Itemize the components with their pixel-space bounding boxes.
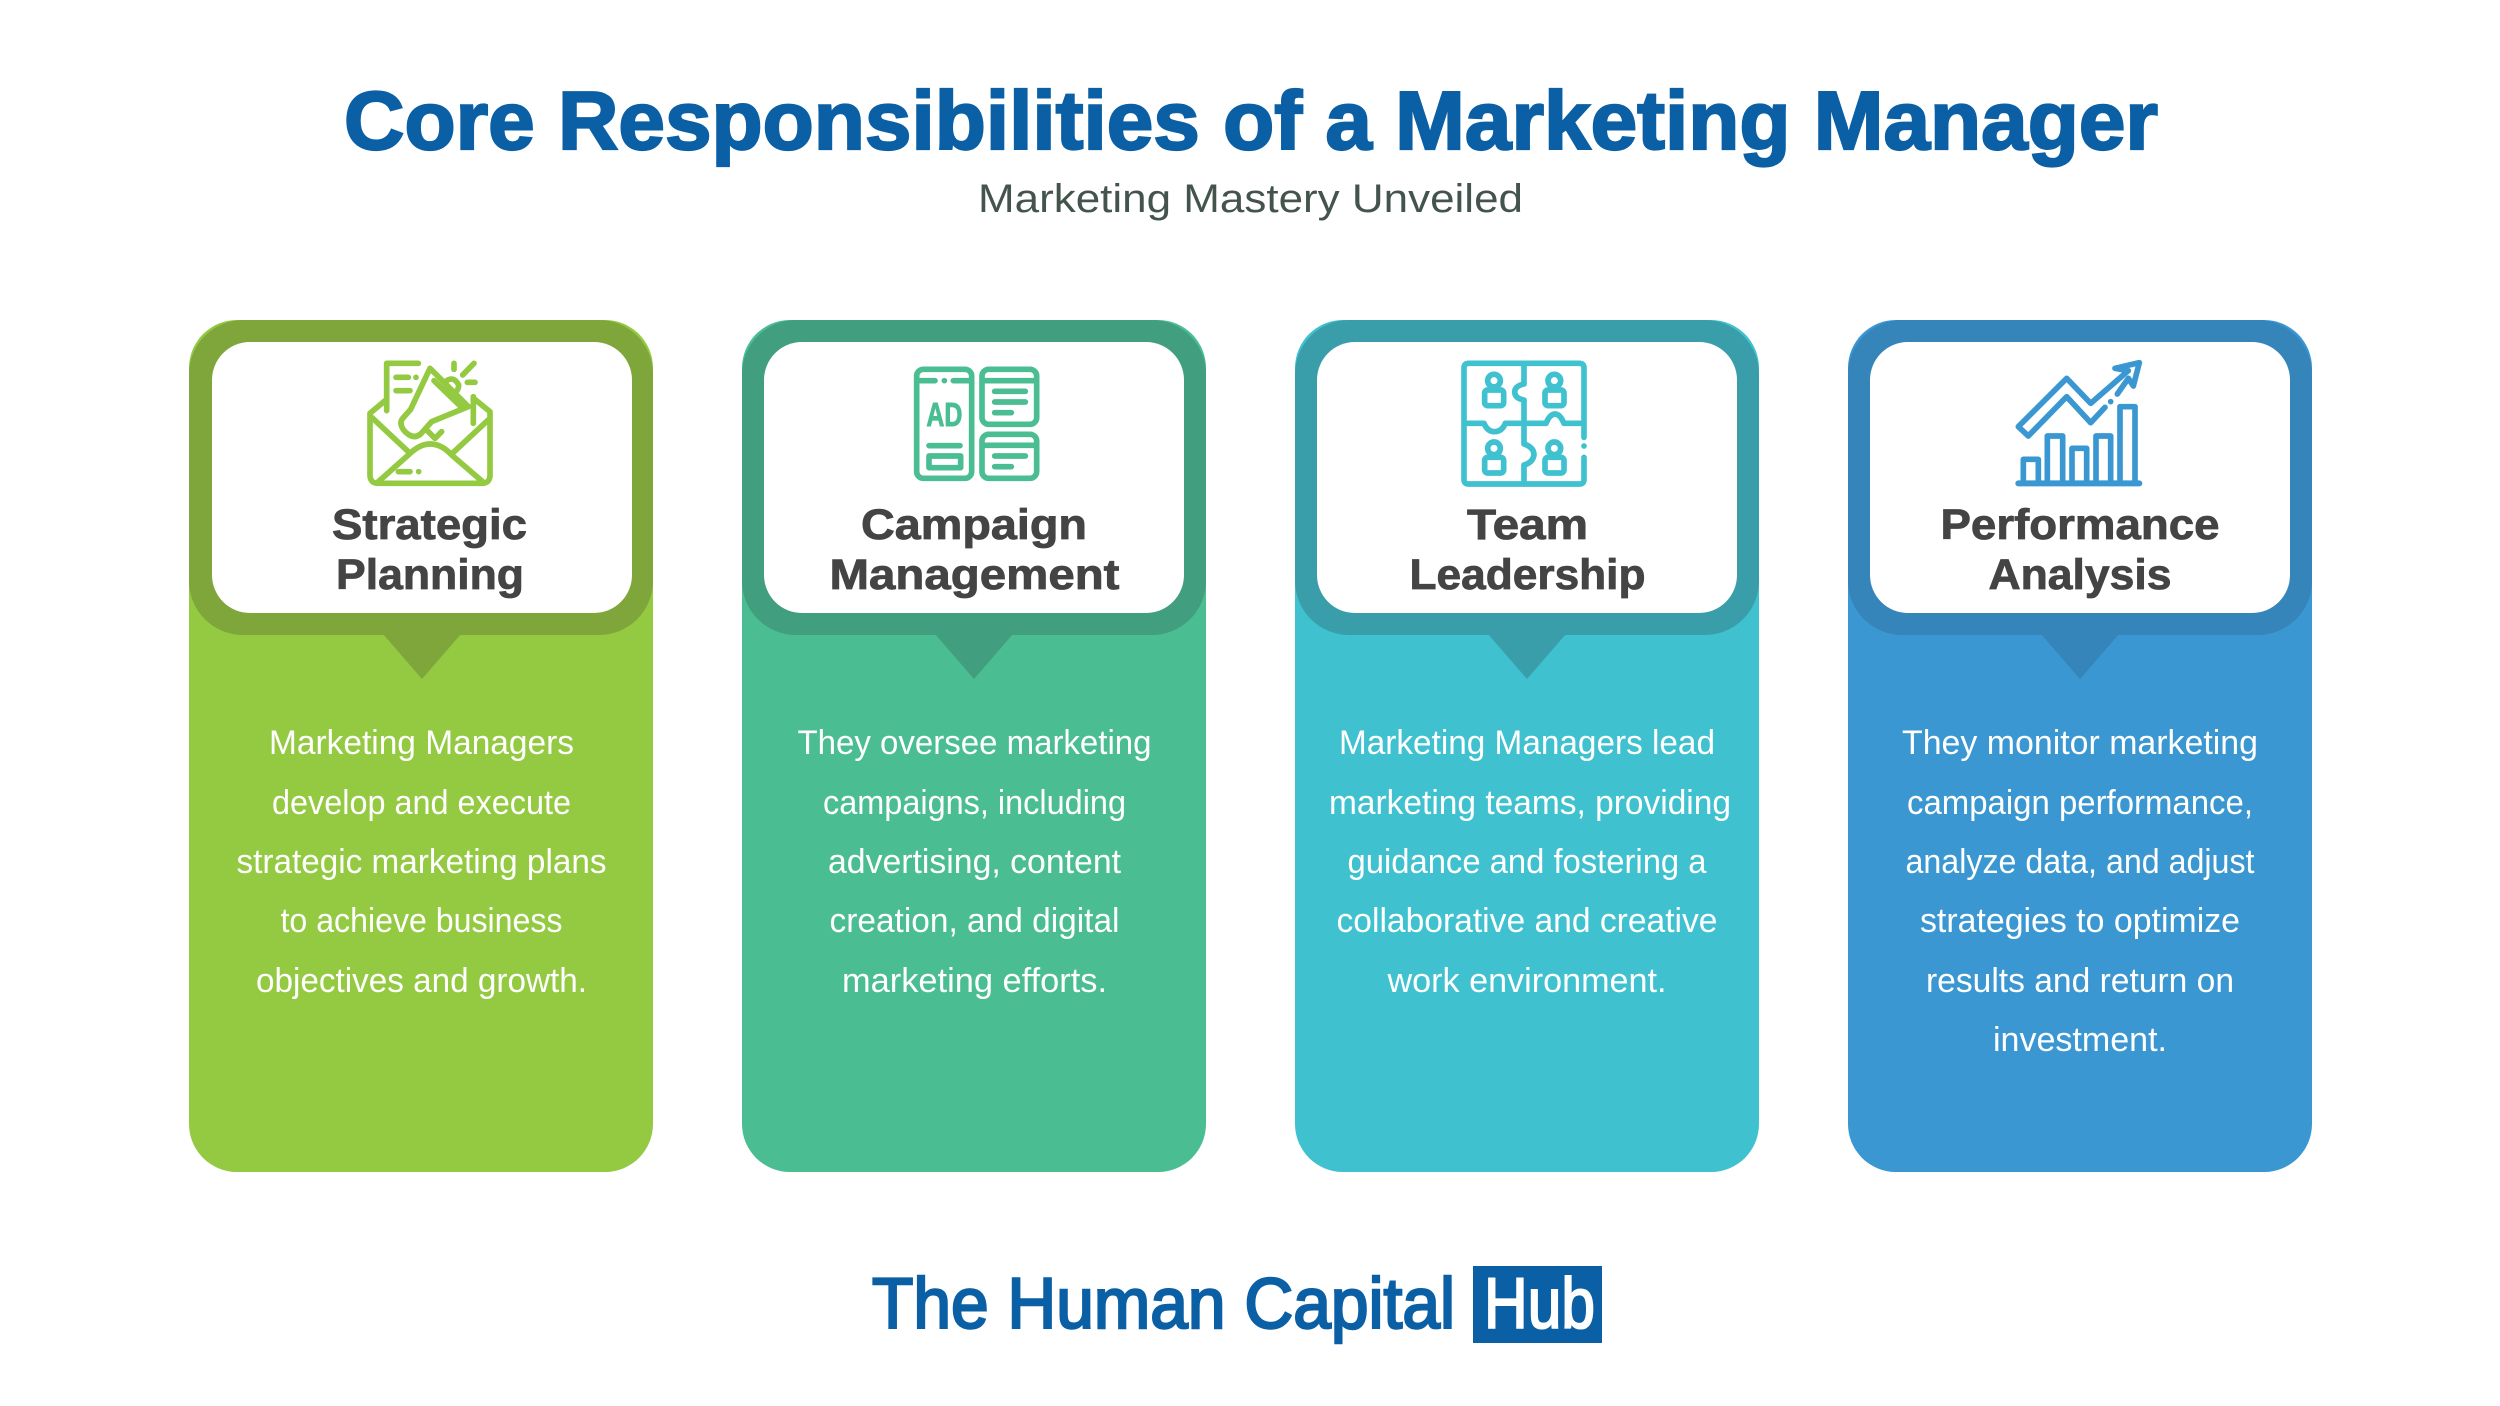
heading	[830, 501, 1120, 599]
description text	[1902, 724, 2258, 1059]
description text	[1329, 724, 1731, 1000]
panel: team leadership	[1295, 320, 1759, 1172]
description text: to achieve business	[280, 902, 562, 940]
description text: They oversee marketing	[798, 724, 1152, 762]
heading: Planning	[336, 551, 524, 599]
heading: Analysis	[1988, 551, 2172, 599]
description text: guidance and fostering a	[1348, 843, 1707, 881]
description text	[236, 724, 606, 1000]
description text: strategic marketing plans	[236, 843, 606, 881]
description text: marketing teams, providing	[1329, 784, 1731, 822]
description text	[798, 724, 1152, 1000]
white header box	[212, 342, 632, 613]
description text: campaigns, including	[823, 784, 1126, 822]
white header box	[1317, 342, 1737, 613]
description text: creation, and digital	[830, 902, 1120, 940]
icon: ad layout	[917, 369, 1037, 478]
heading: Campaign	[861, 501, 1087, 549]
pointer	[2041, 634, 2119, 679]
heading: Team	[1467, 501, 1588, 549]
panel: performance analysis	[1848, 320, 2312, 1172]
description text: develop and execute	[272, 784, 571, 822]
heading	[332, 501, 527, 599]
heading: Performance	[1940, 501, 2220, 549]
description text: collaborative and creative	[1336, 902, 1718, 940]
description text: Marketing Managers lead	[1339, 724, 1715, 762]
heading: Leadership	[1410, 551, 1646, 599]
AD label: AD	[926, 397, 962, 434]
icon: growth chart	[2018, 363, 2139, 483]
heading	[1410, 501, 1646, 599]
description text: objectives and growth.	[256, 962, 587, 1000]
description text: results and return on	[1926, 962, 2234, 1000]
heading: Management	[830, 551, 1120, 599]
heading: Strategic	[332, 501, 527, 549]
description text: marketing efforts.	[842, 962, 1107, 1000]
description text: strategies to optimize	[1920, 902, 2240, 940]
white header box	[1870, 342, 2290, 613]
pointer	[935, 634, 1013, 679]
description text: Marketing Managers	[269, 724, 574, 762]
description text: campaign performance,	[1907, 784, 2253, 822]
description text: analyze data, and adjust	[1906, 843, 2255, 881]
heading	[1940, 501, 2220, 599]
logo: The Human Capital Hub: Hub	[1484, 1265, 1595, 1344]
white header box	[764, 342, 1184, 613]
icon: envelope with megaphone	[370, 363, 490, 483]
pointer	[1488, 634, 1566, 679]
logo: The Human Capital Hub: The Human Capital	[872, 1265, 1455, 1344]
title: Core Responsibilities of a Marketing Manager	[344, 74, 2158, 167]
description text: advertising, content	[828, 843, 1122, 881]
description text: investment.	[1993, 1021, 2167, 1059]
icon: puzzle team	[1464, 363, 1584, 484]
panel: strategic planning	[189, 320, 653, 1172]
panel: campaign management	[742, 320, 1206, 1172]
subtitle: Marketing Mastery Unveiled	[978, 177, 1523, 221]
pointer	[383, 634, 461, 679]
description text: They monitor marketing	[1902, 724, 2258, 762]
description text: work environment.	[1386, 962, 1666, 1000]
